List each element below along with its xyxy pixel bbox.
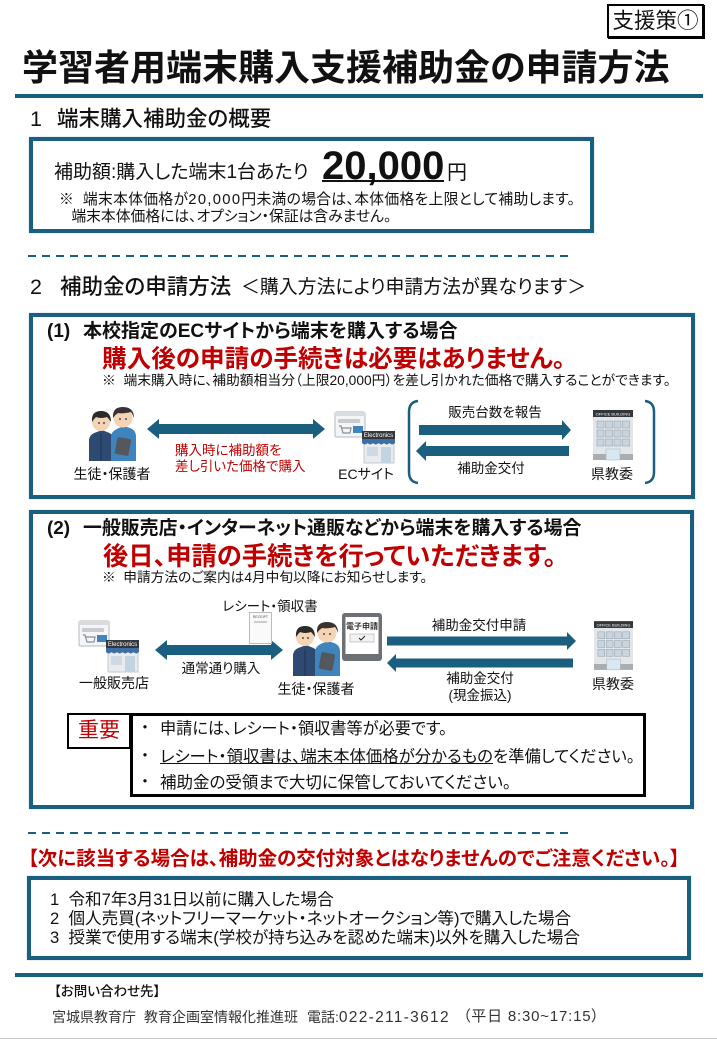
- ineligible list: 1 令和7年3月31日以前に購入した場合: [50, 890, 334, 909]
- case 1 red message: 購入後の申請の手続きは必要はありません。: [102, 346, 565, 373]
- case 2 heading: (2): [47, 518, 70, 539]
- right bracket: [644, 400, 656, 484]
- label: student and guardian: 生徒・保護者: [278, 681, 354, 697]
- heading note: depends on purchase method: ＜購入方法により申請方法が異なります＞: [241, 277, 586, 298]
- important label: 重要: [78, 719, 120, 742]
- ineligible list: 3 授業で使用する端末(学校が持ち込みを認めた端末)以外を購入した場合: [50, 928, 580, 947]
- label: normal purchase: 通常通り購入: [182, 661, 260, 676]
- amount 20,000: 20,000: [322, 144, 444, 188]
- contact details: [52, 1008, 600, 1026]
- label: prefectural board: 県教委: [591, 466, 633, 482]
- important label: [67, 713, 131, 749]
- overview notes: [59, 191, 575, 225]
- case 1 note: ※ 端末購入時に、補助額相当分（上限20,000円）を差し引かれた価格で購入することができます。: [102, 373, 671, 388]
- bullets: ・: [141, 774, 149, 791]
- panel: case 1 EC site: [29, 313, 695, 499]
- item 3: 補助金の受領まで大切に保管しておいてください。: [160, 774, 511, 792]
- contact details: 教育企画室情報化推進班: [144, 1009, 298, 1025]
- icon: EC site: [334, 412, 395, 464]
- label: subsidy grant cash transfer: (現金振込): [448, 688, 512, 703]
- footer rule: [15, 973, 703, 977]
- arrow: report to board: [419, 420, 571, 440]
- icon: student and guardian: [89, 407, 136, 461]
- contact details: 宮城県教育庁: [52, 1009, 136, 1025]
- case 2 red message: 後日、申請の手続きを行っていただきます。: [103, 543, 556, 571]
- red warning heading: 【次に該当する場合は、補助金の交付対象とはなりませんのでご注意ください。】: [28, 848, 680, 870]
- arrow: two-way normal purchase: [155, 640, 283, 660]
- icon: board building: [593, 410, 633, 460]
- panel: case 2 general retailers: [29, 510, 694, 809]
- red caption: purchase at discounted price: 購入時に補助額を: [175, 443, 281, 458]
- left bracket: [408, 400, 418, 484]
- icon: receipt: [249, 612, 272, 644]
- arrow: two-way purchase: [147, 419, 325, 439]
- red caption: purchase at discounted price: [175, 443, 306, 474]
- bottom edge line: [0, 1038, 717, 1039]
- case 2 heading: 一般販売店・インターネット通販などから端末を購入する場合: [83, 518, 581, 539]
- ineligible list: [50, 890, 580, 947]
- overview notes: ※ 端末本体価格が20,000円未満の場合は、本体価格を上限として補助します。: [59, 192, 575, 208]
- contact details: （平日 8:30~17:15）: [463, 1008, 600, 1025]
- icon: general store: [78, 620, 139, 672]
- important list: [130, 713, 646, 797]
- arrow: application to board: [387, 632, 576, 650]
- heading: section 1: 端末購入補助金の概要: [57, 107, 271, 131]
- label: report sales: 販売台数を報告: [448, 405, 542, 420]
- bullets: ・: [141, 720, 149, 737]
- icon: tablet e-application: 電子申請: [346, 621, 378, 631]
- icon: receipt: RECEIPT: [253, 615, 269, 619]
- item 1: 申請には、レシート・領収書等が必要です。: [160, 720, 447, 738]
- label: subsidy grant cash transfer: 補助金交付: [446, 671, 514, 686]
- overview notes: 端末本体価格には、オプション・保証は含みません。: [71, 209, 391, 225]
- label: subsidy application: 補助金交付申請: [432, 618, 526, 633]
- panel: subsidy overview: [29, 137, 594, 233]
- red caption: purchase at discounted price: 差し引いた価格で購入: [175, 459, 306, 474]
- label: subsidy grant cash transfer: [446, 671, 514, 703]
- arrow: subsidy to guardian: [387, 654, 573, 672]
- label: subsidy grant: 補助金交付: [457, 461, 525, 476]
- heading: section 2: 補助金の申請方法: [60, 275, 231, 299]
- yen unit: 円: [447, 162, 467, 184]
- label: EC site: ECサイト: [338, 466, 394, 482]
- case 1 heading: 本校指定のECサイトから端末を購入する場合: [83, 321, 458, 342]
- panel: ineligible cases: [27, 876, 691, 960]
- case 2 note: ※ 申請方法のご案内は4月中旬以降にお知らせします。: [102, 570, 427, 585]
- icon: board building: [594, 621, 633, 670]
- tag: support measure 1: [607, 4, 704, 38]
- case 1 heading: (1): [47, 321, 70, 342]
- heading: section 1: 1: [30, 107, 42, 131]
- contact details: 電話:022-211-3612: [307, 1009, 450, 1026]
- label: receipt: レシート・領収書: [222, 599, 318, 614]
- item 2: レシート・領収書は、端末本体価格が分かるものを準備してください。: [160, 748, 635, 766]
- title: 学習者用端末購入支援補助金の申請方法: [22, 47, 670, 88]
- title rule: [15, 94, 703, 98]
- ineligible list: 2 個人売買(ネットフリーマーケット・ネットオークション等)で購入した場合: [50, 909, 571, 928]
- label: student and guardian: 生徒・保護者: [74, 466, 150, 482]
- icon: student and guardian: [293, 622, 340, 676]
- subsidy amount line: 補助額:購入した端末1台あたり: [54, 162, 308, 183]
- bullets: [141, 720, 149, 791]
- heading: section 2: 2: [30, 275, 42, 299]
- bullets: ・: [141, 748, 149, 765]
- arrow: subsidy to EC site: [416, 441, 569, 461]
- label: general store: 一般販売店: [79, 675, 149, 691]
- tag: support measure 1: 支援策①: [612, 9, 698, 33]
- contact heading: 【お問い合わせ先】: [54, 984, 160, 999]
- label: prefectural board: 県教委: [592, 676, 634, 692]
- icon: tablet e-application: [342, 613, 382, 661]
